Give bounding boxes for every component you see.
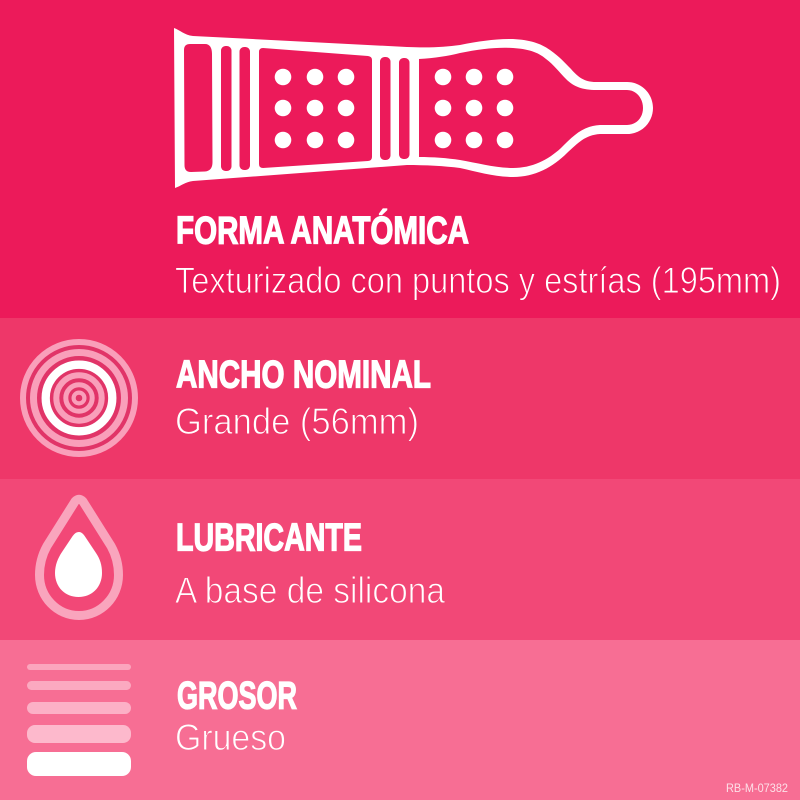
icon: concentric circles bbox=[23, 342, 135, 454]
heading: grosor: GROSOR bbox=[177, 674, 297, 718]
heading: lubricante: LUBRICANTE bbox=[176, 516, 362, 560]
icon: water drop bbox=[40, 499, 118, 616]
panel: ancho nominal bbox=[0, 318, 800, 479]
text: grande: Grande (56mm) bbox=[175, 400, 419, 442]
icon: thickness bars bbox=[27, 664, 131, 776]
panel: lubricante bbox=[0, 479, 800, 640]
text: reference code: RB-M-07382 bbox=[726, 783, 788, 795]
panel: grosor bbox=[0, 640, 800, 800]
text: grueso: Grueso bbox=[175, 716, 286, 758]
heading: ancho nominal: ANCHO NOMINAL bbox=[176, 354, 431, 396]
icon: textured condom outline bbox=[174, 28, 653, 188]
heading: forma anatómica: FORMA ANATÓMICA bbox=[176, 208, 469, 252]
panel: forma anatómica bbox=[0, 0, 800, 318]
text: a base de silicona: A base de silicona bbox=[175, 569, 445, 611]
